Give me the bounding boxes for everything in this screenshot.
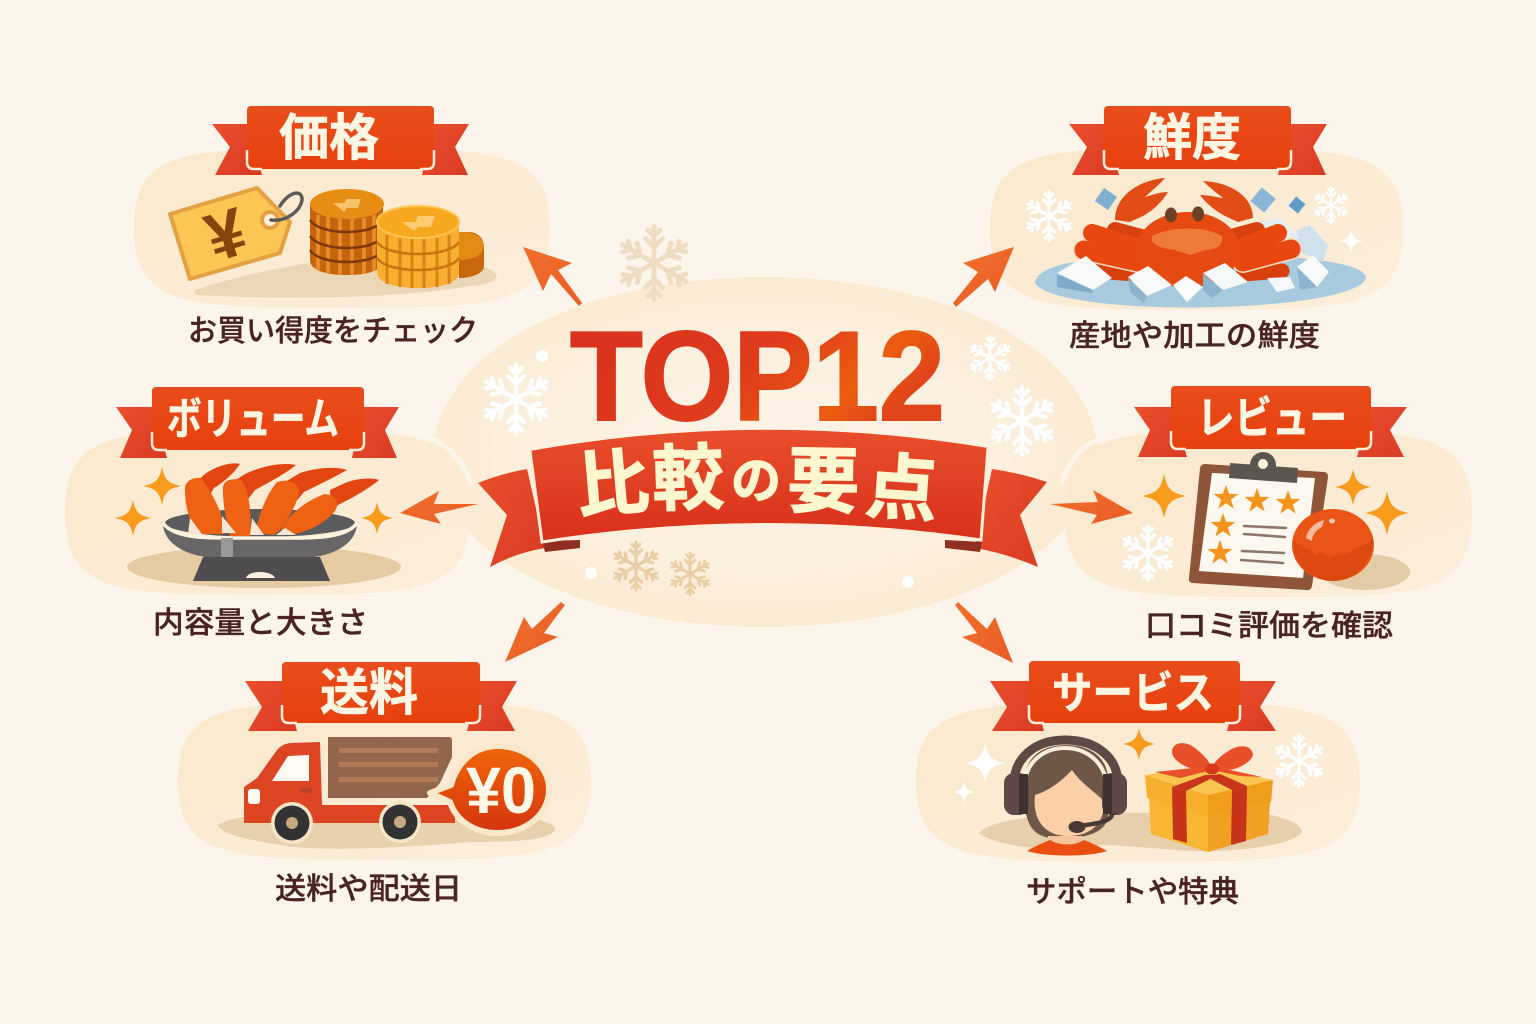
- heading banner: レビュー: レビュー: [1197, 382, 1347, 446]
- heading banner: ボリューム: ボリューム: [167, 383, 339, 447]
- panel: レビュー: [1063, 382, 1472, 645]
- ribbon centre: [530, 430, 988, 542]
- ribbon right tail: [975, 469, 1047, 567]
- caption: 送料や配送日: [275, 864, 462, 908]
- caption: 産地や加工の鮮度: [1069, 311, 1320, 355]
- icon: price tag and coins: [170, 188, 497, 298]
- caption: サポートや特典: [1026, 867, 1239, 911]
- panel blob: [178, 702, 591, 860]
- arrow: to 価格: [523, 247, 582, 306]
- heading banner: レビュー: [1134, 382, 1407, 457]
- panel blob: [134, 148, 550, 308]
- icon: clipboard with stars and crab ball: [1121, 452, 1410, 590]
- ribbon text: 比較の要点: 点: [863, 427, 942, 537]
- arrow: to 送料: [505, 602, 565, 662]
- main title: TOP12: TOP12: [570, 305, 945, 447]
- central blob: [433, 277, 1098, 627]
- arrow: to レビュー: [1050, 490, 1133, 524]
- caption: 口コミ評価を確認: [1145, 601, 1393, 645]
- panel blob: [65, 430, 470, 595]
- panel: 送料: [178, 653, 591, 908]
- heading banner: 価格: [212, 98, 469, 175]
- caption: 内容量と大きさ: [153, 598, 368, 642]
- ribbon text: 比較の要点: の: [731, 441, 781, 513]
- heading banner: ボリューム: [116, 383, 399, 458]
- panel: サービス: [916, 657, 1360, 911]
- ribbon text: 比較の要点: 較: [650, 419, 726, 526]
- heading banner: 鮮度: [1069, 98, 1327, 175]
- panel blob: [916, 702, 1360, 862]
- panel blob: [990, 148, 1403, 310]
- icon: support person and gift box: [953, 728, 1324, 856]
- heading banner: 送料: 送料: [320, 653, 418, 725]
- icon: truck with ¥0 bubble: [218, 737, 555, 849]
- caption: お買い得度をチェック: [188, 306, 478, 350]
- icon: truck with ¥0 bubble: ¥0: [466, 753, 536, 827]
- arrow: to ボリューム: [400, 491, 478, 524]
- heading banner: 鮮度: 鮮度: [1143, 98, 1241, 170]
- panel blob: [1065, 430, 1472, 597]
- heading banner: サービス: サービス: [1052, 657, 1214, 721]
- panel: 価格: [134, 98, 550, 350]
- ribbon text: 比較の要点: 要: [787, 422, 860, 528]
- icon: crab legs in a bowl: [115, 463, 401, 588]
- blob edge highlight: [436, 440, 470, 483]
- heading banner: 価格: 価格: [279, 98, 379, 170]
- ribbon left tail: [478, 469, 545, 567]
- arrow: to 鮮度: [953, 247, 1014, 307]
- heading banner: 送料: [245, 653, 517, 731]
- panel: ボリューム: [65, 383, 470, 642]
- ribbon folds: [542, 540, 982, 552]
- icon: crab on ice: [1025, 178, 1366, 308]
- panel: 鮮度: [990, 98, 1403, 355]
- heading banner: サービス: [990, 657, 1276, 731]
- ribbon text: 比較の要点: 比: [572, 422, 653, 533]
- main ribbon: [478, 419, 1047, 567]
- arrow: to サービス: [955, 602, 1013, 663]
- blob edge highlight: [1063, 438, 1100, 480]
- center snowflakes: [482, 226, 1055, 595]
- icon: price tag and coins: ¥: [197, 193, 255, 277]
